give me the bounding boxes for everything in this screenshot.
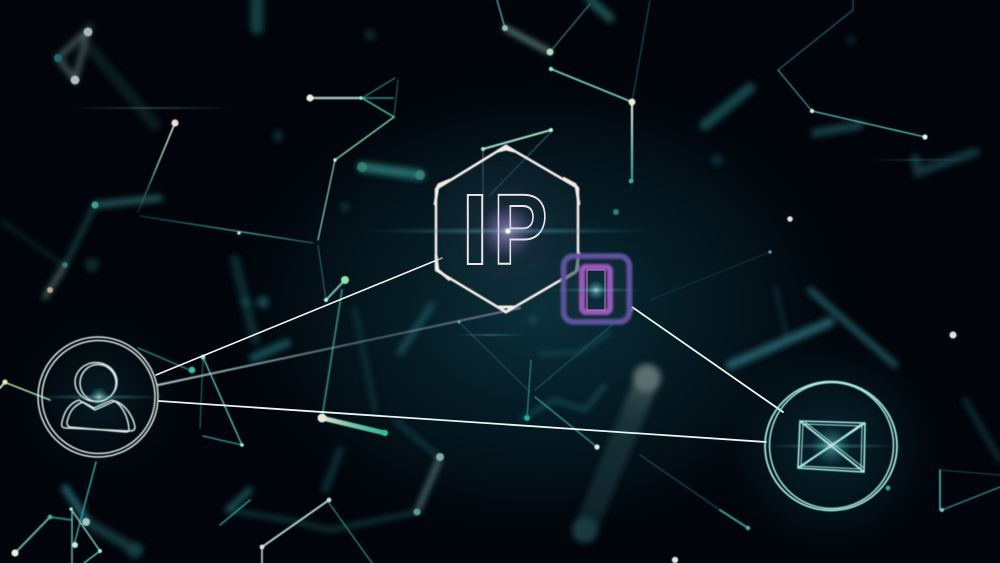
faint horizontal flares xyxy=(62,106,980,337)
envelope xyxy=(798,421,865,472)
lens flare: IP centre xyxy=(357,203,657,259)
hexagon outline xyxy=(435,146,579,312)
user head xyxy=(75,362,117,402)
icon: mail circle xyxy=(761,382,901,510)
IP lettering xyxy=(461,174,548,286)
user shoulders xyxy=(62,400,135,432)
connection lines between icons xyxy=(156,258,783,442)
line: lock to mail xyxy=(632,307,783,412)
line: user to mail xyxy=(159,401,766,442)
IP lettering: P xyxy=(493,174,548,286)
mail ring xyxy=(765,382,897,510)
lens flare: mail centre xyxy=(761,426,901,466)
IP lettering: I xyxy=(461,174,489,286)
line: user to IP xyxy=(156,258,442,375)
lens flare: user centre xyxy=(29,387,169,407)
user ring xyxy=(38,337,158,457)
icon: purple lock frame xyxy=(546,256,646,322)
line: user to lock (soft) xyxy=(158,308,520,385)
icon: IP hexagon xyxy=(357,146,657,312)
icon: user circle xyxy=(38,337,158,457)
